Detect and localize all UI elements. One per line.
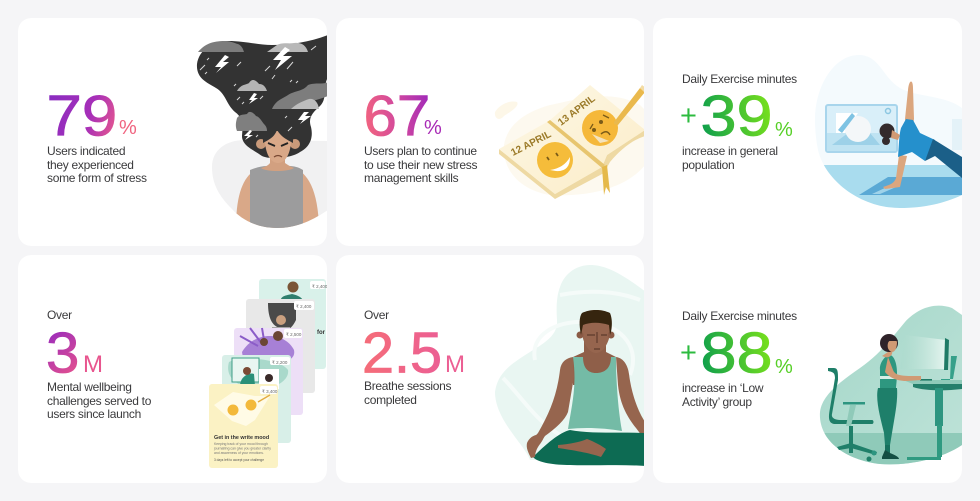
- text: general population: increase in general: [682, 144, 778, 158]
- illustration: stacked challenge cards: [209, 279, 328, 468]
- stat: +39%: +: [680, 100, 697, 132]
- illustration: standing desk: [820, 306, 962, 464]
- stat: +39%: 39: [700, 84, 773, 148]
- card: yellow, get in the write mood: 3 days left to accept your challenge: [214, 458, 264, 462]
- illustration: woman with storm hair: [197, 35, 328, 228]
- text: stress description: some form of stress: [47, 171, 147, 185]
- stat: +88%: +: [680, 337, 697, 369]
- card: yellow, get in the write mood: ₹ 3,400: [262, 389, 278, 394]
- window with pilates ball: [826, 105, 897, 152]
- stat: 79%: %: [119, 117, 137, 139]
- stat: 3M: M: [83, 351, 103, 378]
- text: breathe description: Breathe sessions: [364, 379, 452, 393]
- panel: 79% stress: [18, 18, 328, 246]
- text: stress description: Users indicated: [47, 144, 125, 158]
- text: stress skills description: Users plan to continue: [364, 144, 477, 158]
- stat: 79%: 79: [46, 83, 117, 148]
- icons: lightning bolts: [215, 47, 311, 140]
- date labels: [511, 96, 596, 156]
- stat: +39%: [681, 94, 792, 136]
- card: teal: [222, 355, 291, 443]
- rain streaks: [200, 46, 316, 137]
- card: purple: ₹ 2,500: [286, 332, 302, 337]
- card: green: for: [317, 330, 326, 336]
- neck and chest: [573, 340, 616, 385]
- panel: daily exercise minutes: [653, 18, 965, 483]
- card: grey: [246, 299, 315, 393]
- head: [581, 310, 611, 353]
- text: over: Over: [47, 308, 72, 322]
- text: challenges description: challenges served to: [47, 394, 152, 408]
- icon: pencil: [614, 85, 646, 125]
- stat: 3M: [48, 332, 102, 374]
- text: daily exercise label 1: Daily Exercise minutes: [682, 72, 797, 86]
- card: green: [259, 279, 328, 369]
- desk: [903, 338, 962, 460]
- stat: +88%: %: [775, 356, 793, 378]
- illustration: meditating man: [495, 265, 650, 466]
- text: stress skills description: management skills: [364, 171, 459, 185]
- tank top: [568, 357, 622, 431]
- text: daily exercise label 2: Daily Exercise minutes: [682, 309, 797, 323]
- foot and hand: [558, 439, 606, 457]
- card: grey: ₹ 2,400: [296, 304, 312, 309]
- illustration: journal with emoji: [495, 85, 646, 199]
- woman standing: [877, 334, 921, 459]
- text: stress skills description: to use their new stress: [364, 158, 477, 172]
- card: green: ₹ 2,400: [312, 284, 328, 289]
- panel: 3M challenges: [18, 255, 328, 483]
- icon: sad emoji: [582, 110, 618, 146]
- text: breathe description: completed: [364, 393, 417, 407]
- card: yellow, get in the write mood: and awareness of your emotions.: [214, 451, 264, 455]
- card: teal: ₹ 2,200: [272, 360, 288, 365]
- text: challenges description: Mental wellbeing: [47, 380, 132, 394]
- stat: 2.5M: M: [445, 351, 465, 378]
- stat: +88%: 88: [700, 321, 773, 385]
- card: yellow, get in the write mood: Get in the write mood: [214, 435, 269, 441]
- card: yellow, get in the write mood: Keeping track of your mood through: [214, 442, 268, 446]
- stat: 67%: %: [424, 117, 442, 139]
- card: purple: [234, 328, 303, 415]
- stat: +88%: [681, 332, 792, 374]
- stat: 3M: 3: [46, 322, 79, 385]
- text: over: Over: [364, 308, 389, 322]
- panel: 2.5M breathe sessions: [336, 255, 650, 483]
- card: yellow, get in the write mood: [209, 384, 278, 468]
- icon: happy emoji: [537, 142, 573, 178]
- stat: +39%: %: [775, 119, 793, 141]
- yoga mat: [859, 177, 962, 195]
- text: general population: population: [682, 158, 734, 172]
- stat: 67%: [366, 95, 442, 136]
- stat: 79%: [49, 95, 136, 136]
- date labels: 13 APRIL: [556, 93, 598, 128]
- panel: 67% continue: [336, 18, 646, 246]
- right arm: [616, 357, 645, 440]
- text: low activity group: increase in ‘Low: [682, 381, 764, 395]
- legs: [533, 430, 645, 466]
- date labels: 12 APRIL: [509, 129, 553, 159]
- left arm: [527, 357, 574, 455]
- stat: 67%: 67: [364, 85, 430, 148]
- text: challenges description: users since launch: [47, 407, 141, 421]
- icons: clouds: [198, 41, 328, 131]
- stat: 2.5M: 2.5: [362, 322, 442, 386]
- text: stress description: they experienced: [47, 158, 134, 172]
- woman in side plank: [880, 81, 962, 189]
- text: low activity group: Activity’ group: [682, 395, 752, 409]
- chair: [828, 368, 877, 462]
- card: yellow, get in the write mood: journalling can give you greater clarity: [213, 446, 271, 450]
- illustration: side plank yoga: [815, 55, 962, 208]
